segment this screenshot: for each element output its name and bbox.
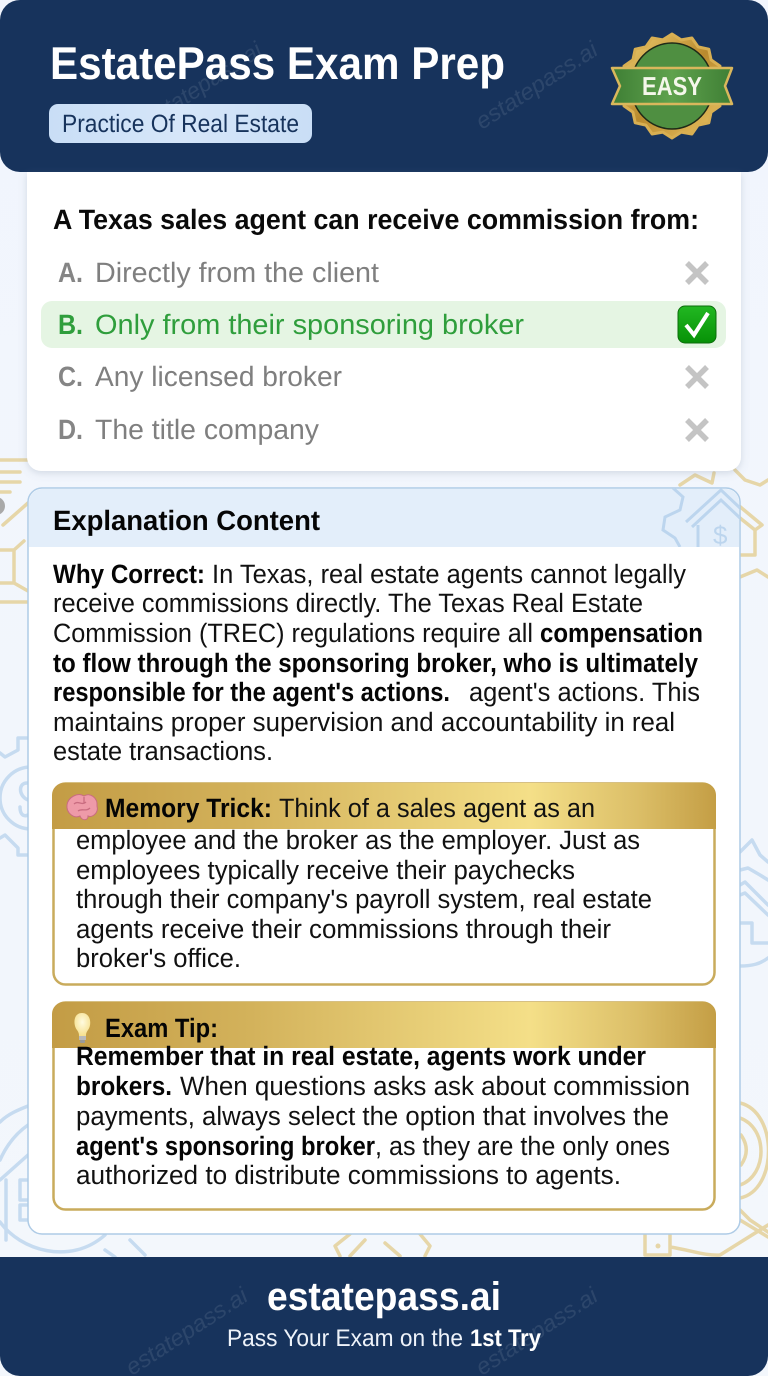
explanation header: Explanation Content [53, 505, 320, 536]
callout: memory trick: employees typically receive their paychecks [76, 855, 575, 885]
option D: The title company [95, 414, 319, 445]
option A [58, 257, 707, 288]
option C: Any licensed broker [95, 361, 342, 392]
callout: memory trick [52, 783, 716, 984]
footer bar [0, 1257, 768, 1376]
icon: green check [678, 306, 716, 343]
callout: memory trick: agents receive their commissions through their [76, 914, 611, 944]
why correct text: receive commissions directly. The Texas Real Estate [53, 588, 643, 618]
header watermarks: estatepass.ai [139, 36, 267, 132]
subject pill [49, 104, 312, 143]
callout: exam tip: brokers. [76, 1071, 172, 1101]
callout: exam tip: When questions asks ask about commission [180, 1071, 690, 1101]
callout: exam tip [52, 1002, 716, 1210]
callout: memory trick: through their company's payroll system, real estate [76, 884, 652, 914]
callout: exam tip: Exam Tip: [105, 1013, 218, 1043]
explanation header [29, 488, 740, 550]
why correct text: Commission (TREC) regulations require all [53, 618, 533, 648]
title: EstatePass Exam Prep [50, 37, 505, 89]
explanation header: $ [713, 520, 728, 550]
why correct text: agent's actions. This [469, 677, 700, 707]
header watermarks [139, 36, 603, 134]
why correct text: to flow through the sponsoring broker, who is ultimately [53, 648, 698, 678]
option C [58, 361, 707, 392]
why correct text [53, 559, 703, 766]
callout: exam tip: , as they are the only ones [375, 1131, 670, 1161]
callout: exam tip: authorized to distribute commissions to agents. [76, 1160, 621, 1190]
why correct text: responsible for the agent's actions. [53, 677, 450, 707]
option A: Directly from the client [95, 257, 379, 288]
why correct text: estate transactions. [53, 736, 273, 766]
footer tagline: Pass Your Exam on the [227, 1325, 463, 1352]
callout: exam tip: payments, always select the option that involves the [76, 1101, 669, 1131]
why correct text: compensation [540, 618, 703, 648]
question text: A Texas sales agent can receive commission from: [53, 204, 699, 235]
option C: C. [58, 361, 83, 392]
footer site name: estatepass.ai [267, 1275, 501, 1319]
why correct text: In Texas, real estate agents cannot legally [212, 559, 687, 589]
callout: memory trick: broker's office. [76, 943, 241, 973]
option B correct [41, 301, 726, 348]
callout: exam tip: agent's sponsoring broker [76, 1131, 375, 1161]
panel: question card [27, 172, 741, 471]
callout: memory trick: Think of a sales agent as an [279, 793, 595, 823]
footer tagline: 1st Try [470, 1325, 542, 1352]
why correct text: maintains proper supervision and accountability in real [53, 707, 675, 737]
option D [58, 414, 707, 445]
difficulty badge [612, 34, 732, 138]
icon: brain [67, 795, 97, 820]
option B correct: B. [58, 309, 83, 340]
panel: explanation [28, 488, 740, 1234]
header bar [0, 0, 768, 172]
callout: memory trick: employee and the broker as the employer. Just as [76, 825, 640, 855]
option A: A. [58, 257, 83, 288]
why correct text: Why Correct: [53, 559, 205, 589]
callout: memory trick: Memory Trick: [105, 793, 272, 823]
option B correct: Only from their sponsoring broker [95, 309, 524, 340]
icon: light bulb [74, 1013, 90, 1043]
option D: D. [58, 414, 83, 445]
header watermarks: estatepass.ai [471, 36, 603, 134]
subject pill: Practice Of Real Estate [62, 110, 299, 138]
footer watermarks [121, 1282, 603, 1376]
difficulty badge: EASY [642, 71, 702, 101]
callout: exam tip: Remember that in real estate, agents work under [76, 1041, 646, 1071]
